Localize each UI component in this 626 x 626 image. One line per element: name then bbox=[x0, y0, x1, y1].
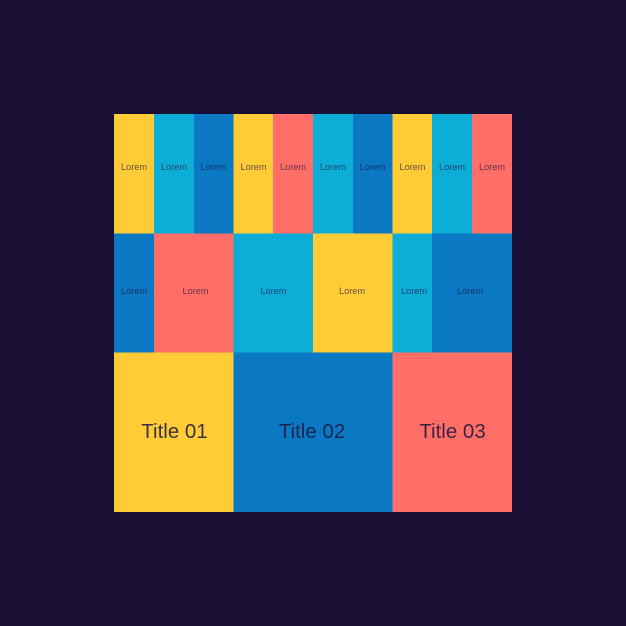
block 9 bbox=[432, 114, 472, 234]
block 3 bbox=[194, 114, 234, 234]
row: top level blocks bbox=[114, 114, 512, 234]
block 6 bbox=[432, 234, 512, 352]
block 4 bbox=[313, 234, 392, 352]
block 6: Lorem bbox=[457, 286, 483, 296]
row: title blocks bbox=[114, 352, 512, 512]
block 2: Lorem bbox=[161, 162, 187, 172]
block 6 bbox=[313, 114, 353, 234]
title block 02 bbox=[234, 352, 392, 512]
block 10: Lorem bbox=[479, 162, 505, 172]
block 8: Lorem bbox=[399, 162, 426, 172]
title block 03: Title 03 bbox=[419, 420, 486, 443]
block 2 bbox=[154, 234, 234, 352]
block 1: Lorem bbox=[121, 162, 147, 172]
block 2 bbox=[154, 114, 194, 234]
block 4 bbox=[234, 114, 273, 234]
block 10 bbox=[472, 114, 512, 234]
block 8 bbox=[392, 114, 432, 234]
block 2: Lorem bbox=[182, 286, 209, 296]
title block 02: Title 02 bbox=[279, 420, 345, 443]
block 7 bbox=[353, 114, 392, 234]
block 3: Lorem bbox=[260, 286, 287, 296]
block 4: Lorem bbox=[339, 286, 365, 296]
block 1 bbox=[114, 234, 154, 352]
title block 01: Title 01 bbox=[141, 420, 208, 443]
block 3 bbox=[234, 234, 313, 352]
block 3: Lorem bbox=[200, 162, 227, 172]
block 1: Lorem bbox=[121, 286, 147, 296]
block 5: Lorem bbox=[401, 286, 427, 296]
block 4: Lorem bbox=[240, 162, 267, 172]
block 9: Lorem bbox=[439, 162, 465, 172]
title block 03 bbox=[392, 352, 512, 512]
block 5: Lorem bbox=[280, 162, 306, 172]
block 6: Lorem bbox=[320, 162, 346, 172]
block 7: Lorem bbox=[359, 162, 386, 172]
block 1 bbox=[114, 114, 154, 234]
block 5 bbox=[273, 114, 313, 234]
block 5 bbox=[392, 234, 432, 352]
row: middle level blocks bbox=[114, 234, 512, 352]
title block 01 bbox=[114, 352, 234, 512]
